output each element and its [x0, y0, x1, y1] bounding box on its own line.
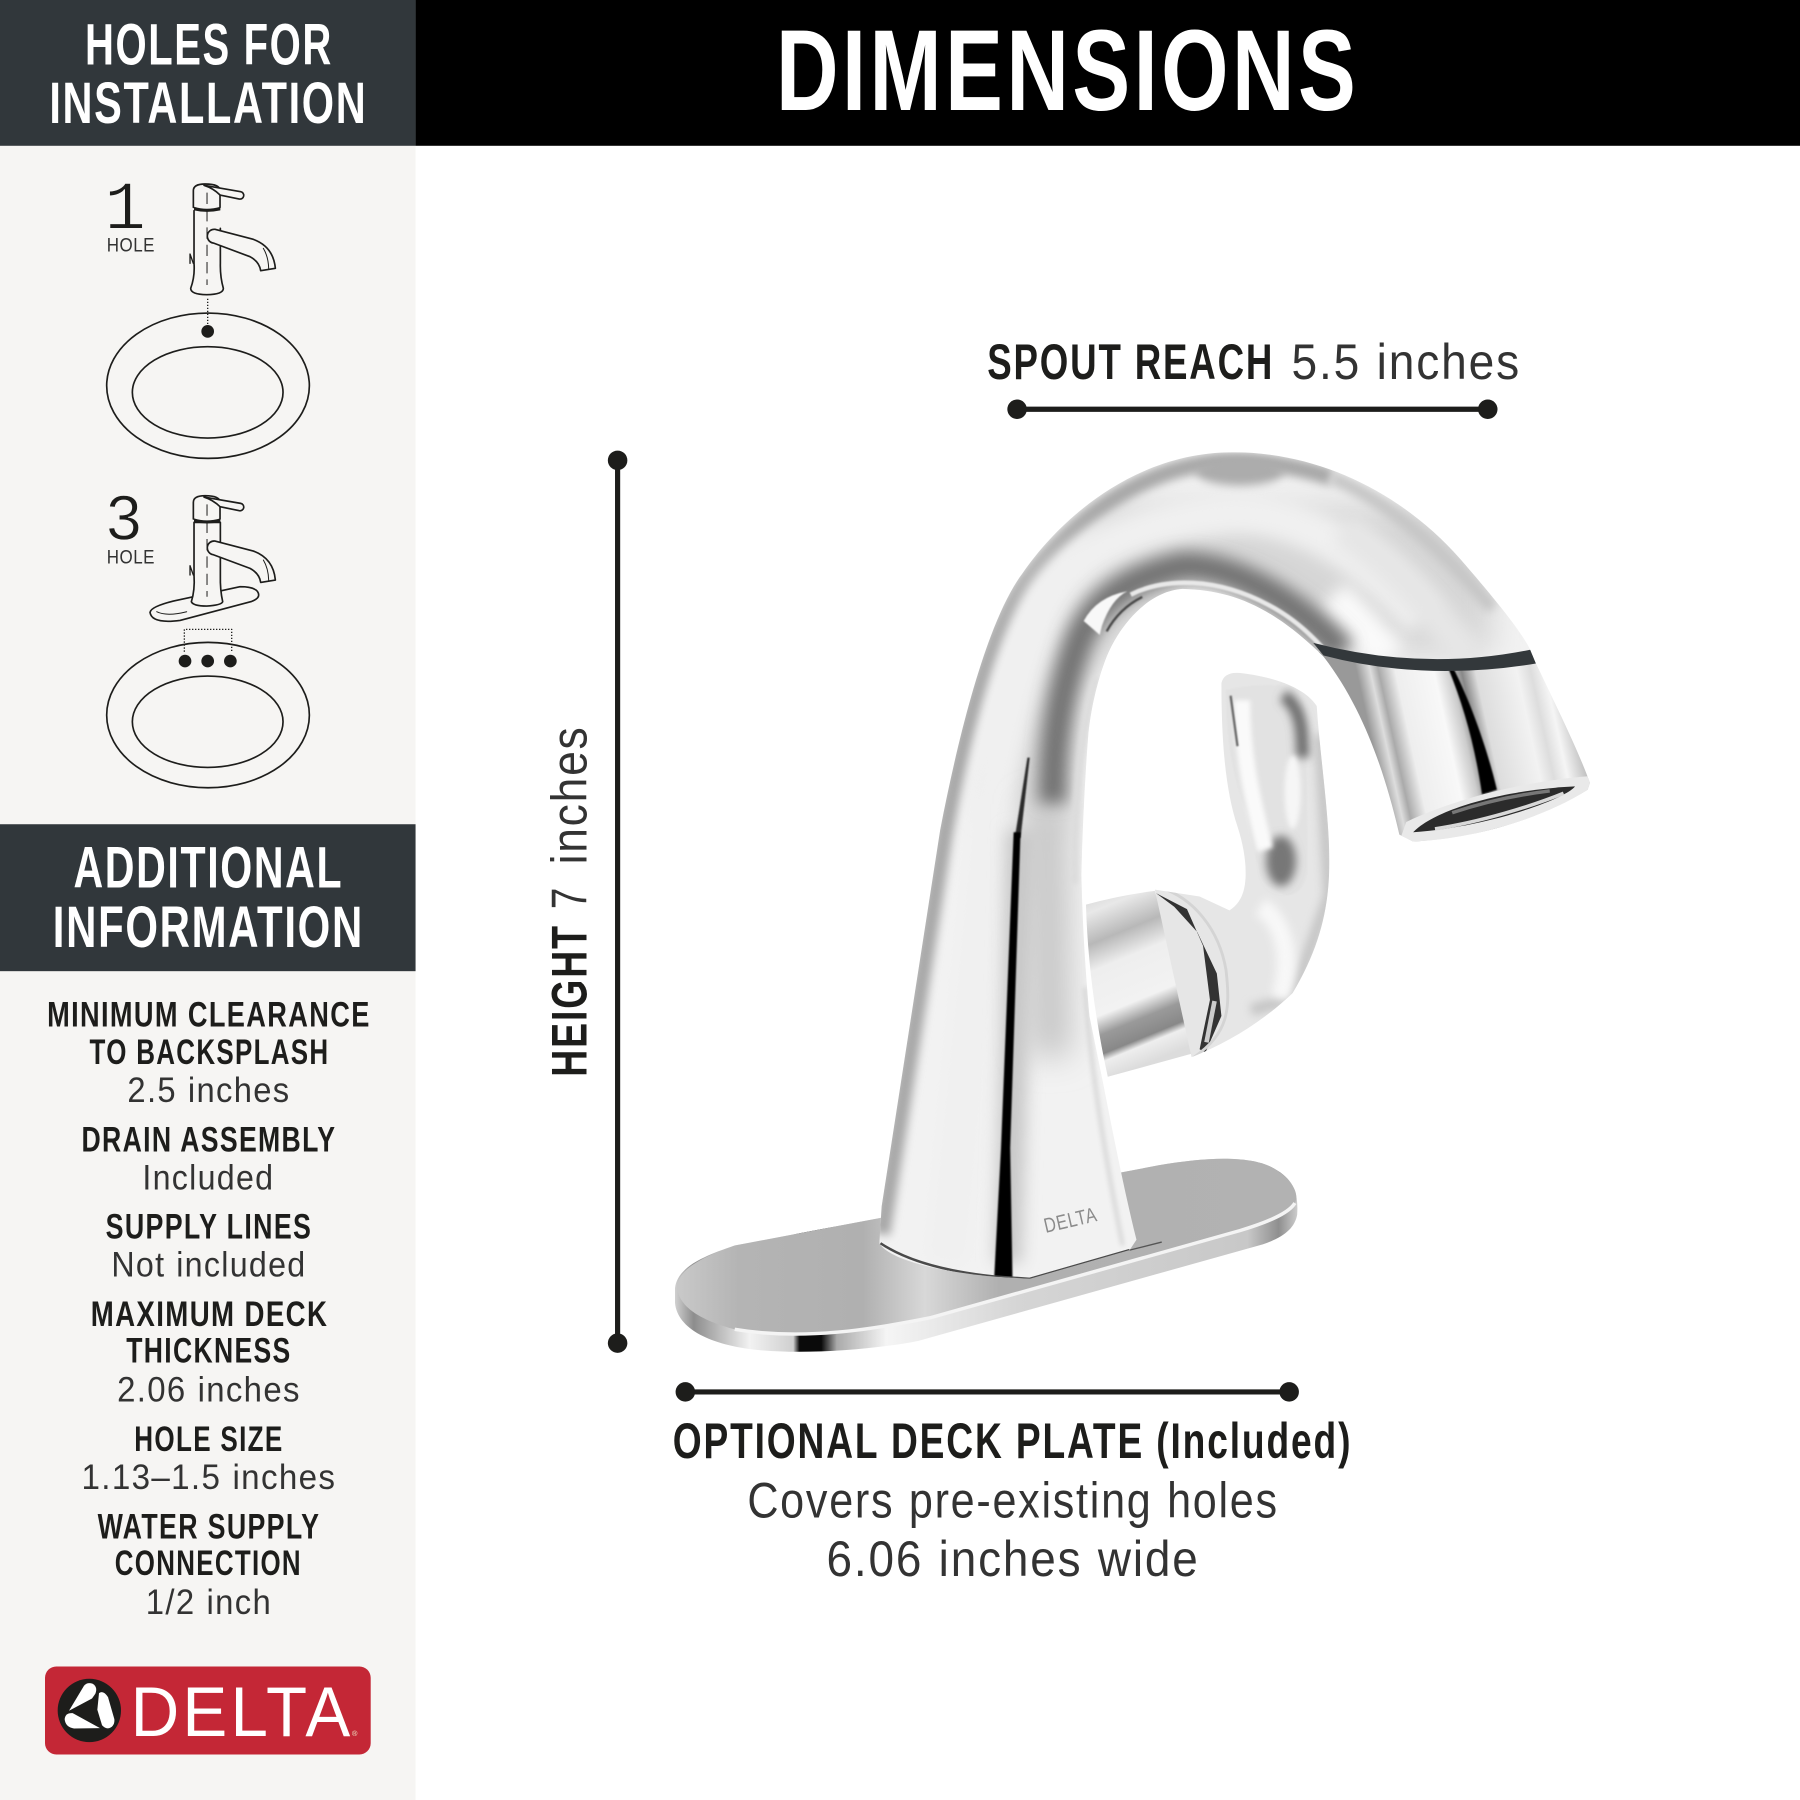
heading: additional information: INFORMATION: [53, 895, 364, 960]
callout: optional deck plate: 6.06 inches wide: [827, 1530, 1200, 1587]
spec: minimum clearance: MINIMUM CLEARANCE: [47, 994, 371, 1034]
callout: height: HEIGHT: [541, 924, 598, 1077]
spec: minimum clearance: TO BACKSPLASH: [90, 1032, 329, 1072]
spec: maximum deck thickness: [91, 1294, 328, 1410]
spec: hole size: HOLE SIZE: [134, 1419, 284, 1459]
title banner: DIMENSIONS: [776, 7, 1359, 135]
callout: height: 7: [541, 886, 598, 909]
label: 1 hole: HOLE: [107, 234, 155, 256]
panel: 3 hole installation diagram: [106, 484, 309, 788]
title banner: [416, 0, 1800, 146]
callout: optional deck plate: OPTIONAL DECK PLATE (Included): [673, 1412, 1352, 1469]
icon: single hole faucet and sink: [107, 184, 309, 458]
spec: maximum deck thickness: 2.06 inches: [117, 1370, 301, 1410]
callout: spout reach: [987, 333, 1521, 419]
callout: spout reach: 5.5 inches: [1291, 333, 1521, 390]
spray head band: [1313, 643, 1536, 671]
text block: additional information specs: [47, 994, 371, 1622]
spec: supply lines: [106, 1207, 312, 1285]
spec: minimum clearance: [47, 994, 371, 1110]
heading: additional information: [0, 824, 416, 971]
panel: sidebar background: [0, 0, 416, 1800]
heading: additional information: ADDITIONAL: [73, 835, 343, 900]
spec: water supply connection: WATER SUPPLY: [98, 1506, 320, 1546]
spray head: [1319, 652, 1590, 842]
faucet brand mark: DELTA: [1042, 1203, 1099, 1238]
spec: supply lines: SUPPLY LINES: [106, 1207, 312, 1247]
arrow: height dimension line: [608, 451, 627, 1353]
callout: optional deck plate: Covers pre-existing holes: [747, 1472, 1279, 1529]
spec: supply lines: Not included: [111, 1245, 307, 1285]
spec: minimum clearance: 2.5 inches: [127, 1070, 290, 1110]
callout: height: inches: [541, 726, 598, 864]
label: 1 hole: 1: [104, 171, 146, 249]
callout: height: [541, 451, 627, 1353]
spec: maximum deck thickness: MAXIMUM DECK: [91, 1294, 328, 1334]
callout: optional deck plate: [673, 1382, 1352, 1587]
icon: three hole faucet with deck plate and sink: [107, 496, 309, 788]
heading: holes for installation: HOLES FOR: [85, 12, 333, 77]
callout: spout reach: SPOUT REACH: [987, 333, 1274, 390]
label: 3 hole: HOLE: [107, 547, 155, 569]
spec: hole size: 1.13–1.5 inches: [82, 1457, 336, 1497]
spec: water supply connection: 1/2 inch: [146, 1582, 272, 1622]
spec: drain assembly: Included: [142, 1157, 274, 1197]
spec: hole size: [82, 1419, 336, 1497]
arrow: deck plate dimension line: [676, 1382, 1299, 1402]
spout body: [872, 448, 1607, 1286]
aerator opening: [1402, 776, 1590, 842]
icon: delta logo: [45, 1666, 371, 1754]
handle lever: [1155, 673, 1330, 1057]
spec: drain assembly: DRAIN ASSEMBLY: [82, 1119, 336, 1159]
spray head reflection: [1449, 669, 1497, 794]
spec: drain assembly: [82, 1119, 336, 1197]
spec: maximum deck thickness: THICKNESS: [126, 1331, 292, 1371]
heading: holes for installation: [0, 0, 416, 146]
handle cylinder: [1086, 891, 1200, 1077]
image: chrome faucet illustration: [675, 448, 1607, 1352]
icon: delta logo: ®: [352, 1729, 358, 1738]
spec: water supply connection: [98, 1506, 320, 1622]
panel: 1 hole installation diagram: [104, 171, 309, 458]
label: 3 hole: 3: [106, 484, 142, 554]
label: 3 hole: [106, 484, 155, 569]
spec: water supply connection: CONNECTION: [115, 1543, 302, 1583]
icon: delta logo: DELTA: [131, 1672, 353, 1751]
heading: holes for installation: INSTALLATION: [49, 71, 367, 136]
arrow: spout reach dimension line: [1007, 399, 1498, 419]
body shading: [880, 458, 1492, 1279]
deck plate: [675, 1159, 1297, 1352]
